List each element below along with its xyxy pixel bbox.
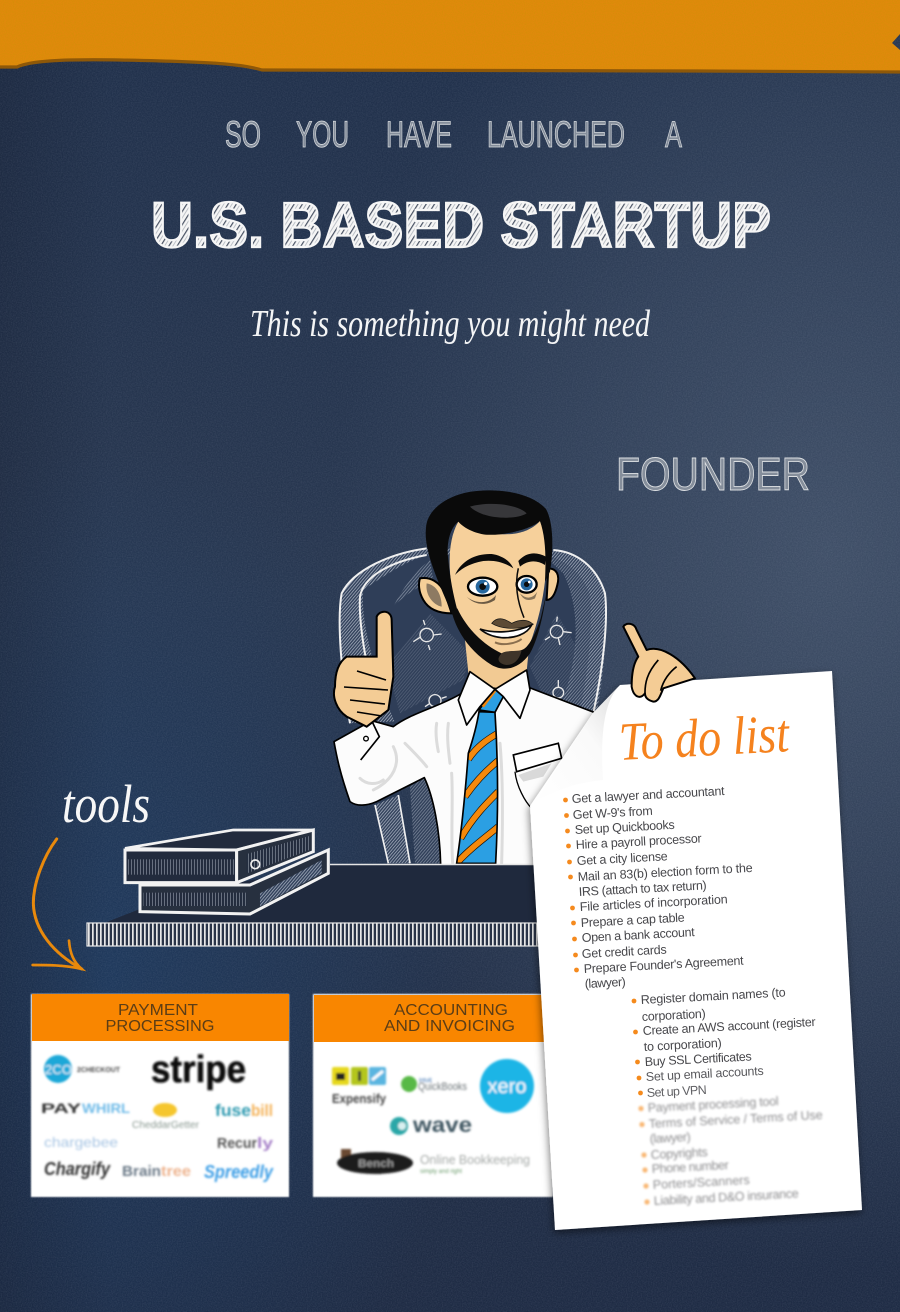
logos: payment providers [41,1049,274,1182]
orange top band [0,0,900,73]
checklist: legal setup: Set up Quickbooks [574,818,675,837]
checklist: online setup: corporation) [641,1007,706,1024]
checklist: legal setup: Get W-9's from [572,804,653,822]
checklist: policies and insurance [638,1094,823,1208]
collar [458,670,530,725]
logos: accounting providers [332,1059,534,1175]
logos: payment providers: stripe [151,1049,246,1091]
checklist: legal setup: File articles of incorporation [579,892,728,914]
neck [465,640,528,688]
panel: payment processing [31,994,289,1197]
checklist: policies and insurance: Payment processing tool [647,1094,779,1115]
icon: office chair [340,548,606,863]
checklist: legal setup: Mail an 83(b) election form to the [577,861,753,884]
icon: stack of books [125,830,328,914]
founder head [419,490,558,669]
checklist: legal setup: Get a lawyer and accountant [571,784,725,806]
heading: so you have launched a [225,114,682,155]
checklist: online setup: Create an AWS account (register [642,1015,816,1038]
logos: payment providers: PAY [41,1100,82,1116]
logos: payment providers: Chargify [44,1159,111,1179]
icon: fist finger lines [344,671,388,716]
desk [87,864,540,946]
logos: payment providers: fuse [215,1101,251,1120]
heading: so you have launched a: LAUNCHED [487,114,625,155]
logos: payment providers: bill [251,1101,273,1120]
checklist: online setup: Register domain names (to [640,985,786,1007]
logos: payment providers: CheddarGetter [132,1120,200,1131]
checklist: policies and insurance: Liability and D&O insurance [653,1186,799,1208]
logos: payment providers: Brain [122,1163,161,1180]
heading: payment processing: PAYMENT [118,1002,199,1019]
checklist: legal setup: (lawyer) [584,975,626,991]
heading: so you have launched a: YOU [296,114,349,155]
heading: payment processing [106,1002,214,1035]
logos: payment providers: 2CHECKOUT [77,1065,120,1074]
label: founder: FOUNDER [616,448,810,500]
checklist: online setup: to corporation) [643,1036,722,1054]
shirt [334,687,597,865]
checklist: legal setup: IRS (attach to tax return) [578,878,707,899]
checklist: policies and insurance: Terms of Service / Terms of Use [648,1108,823,1131]
checklist: policies and insurance: Copyrights [650,1145,708,1162]
logos: payment providers: WHIRL [82,1100,130,1116]
heading: so you have launched a: SO [225,114,261,155]
icon: left hand thumbs up [334,612,393,727]
icon: right hand holding list [623,624,695,702]
arrow: tools down to cards [33,839,82,969]
checklist: online setup [632,985,816,1100]
founder illustration [334,490,606,865]
checklist: legal setup: Get a city license [576,849,668,868]
heading: so you have launched a: HAVE [386,114,452,155]
checklist: legal setup: Get credit cards [581,943,667,961]
logos: accounting providers: xero [488,1076,526,1098]
logos: accounting providers: Online Bookkeeping [420,1153,530,1167]
logos: accounting providers: QuickBooks [418,1081,467,1093]
logos: payment providers: ly [257,1135,274,1152]
logos: payment providers: chargebee [44,1134,118,1150]
logos: accounting providers: intuit [419,1078,432,1084]
shirt pocket [513,743,562,808]
checklist: legal setup [563,784,753,991]
checklist: legal setup: Open a bank account [581,925,696,945]
heading: accounting and invoicing: AND INVOICING [384,1018,515,1035]
logos: accounting providers: Bench [358,1158,394,1170]
heading: to do list: To do list [617,703,792,772]
logos: payment providers: 2CO [45,1062,72,1077]
heading: so you have launched a: A [665,114,682,155]
checklist: online setup: Set up email accounts [645,1064,764,1084]
checklist: policies and insurance: (lawyer) [649,1130,691,1146]
panel: to do list paper [530,671,862,1230]
subtitle: This is something you might need [250,303,651,345]
panel: accounting and invoicing [313,994,553,1197]
logos: accounting providers: simply and right [420,1169,462,1175]
paper curl [535,685,620,802]
checklist: legal setup: Prepare Founder's Agreement [583,954,744,976]
label: tools: tools [62,774,150,834]
checklist: online setup: Set up VPN [646,1083,707,1100]
checklist: policies and insurance: Porters/Scanners [652,1173,750,1192]
icon: striped tie [457,688,503,863]
checklist: online setup: Buy SSL Certificates [644,1049,752,1069]
logos: payment providers: Recur [217,1135,257,1152]
logos: payment providers: tree [161,1163,191,1180]
logos: accounting providers: wave [412,1114,472,1137]
heading: payment processing: PROCESSING [106,1018,214,1035]
checklist: legal setup: Prepare a cap table [580,911,685,930]
title: U.S. based startup: U.S. BASED STARTUP [151,189,771,261]
checklist: legal setup: Hire a payroll processor [575,831,702,852]
logos: payment providers: Spreedly [204,1162,274,1182]
logos: accounting providers: Expensify [332,1091,387,1106]
heading: accounting and invoicing [384,1002,515,1035]
checklist: policies and insurance: Phone number [651,1158,729,1176]
heading: accounting and invoicing: ACCOUNTING [394,1002,508,1019]
